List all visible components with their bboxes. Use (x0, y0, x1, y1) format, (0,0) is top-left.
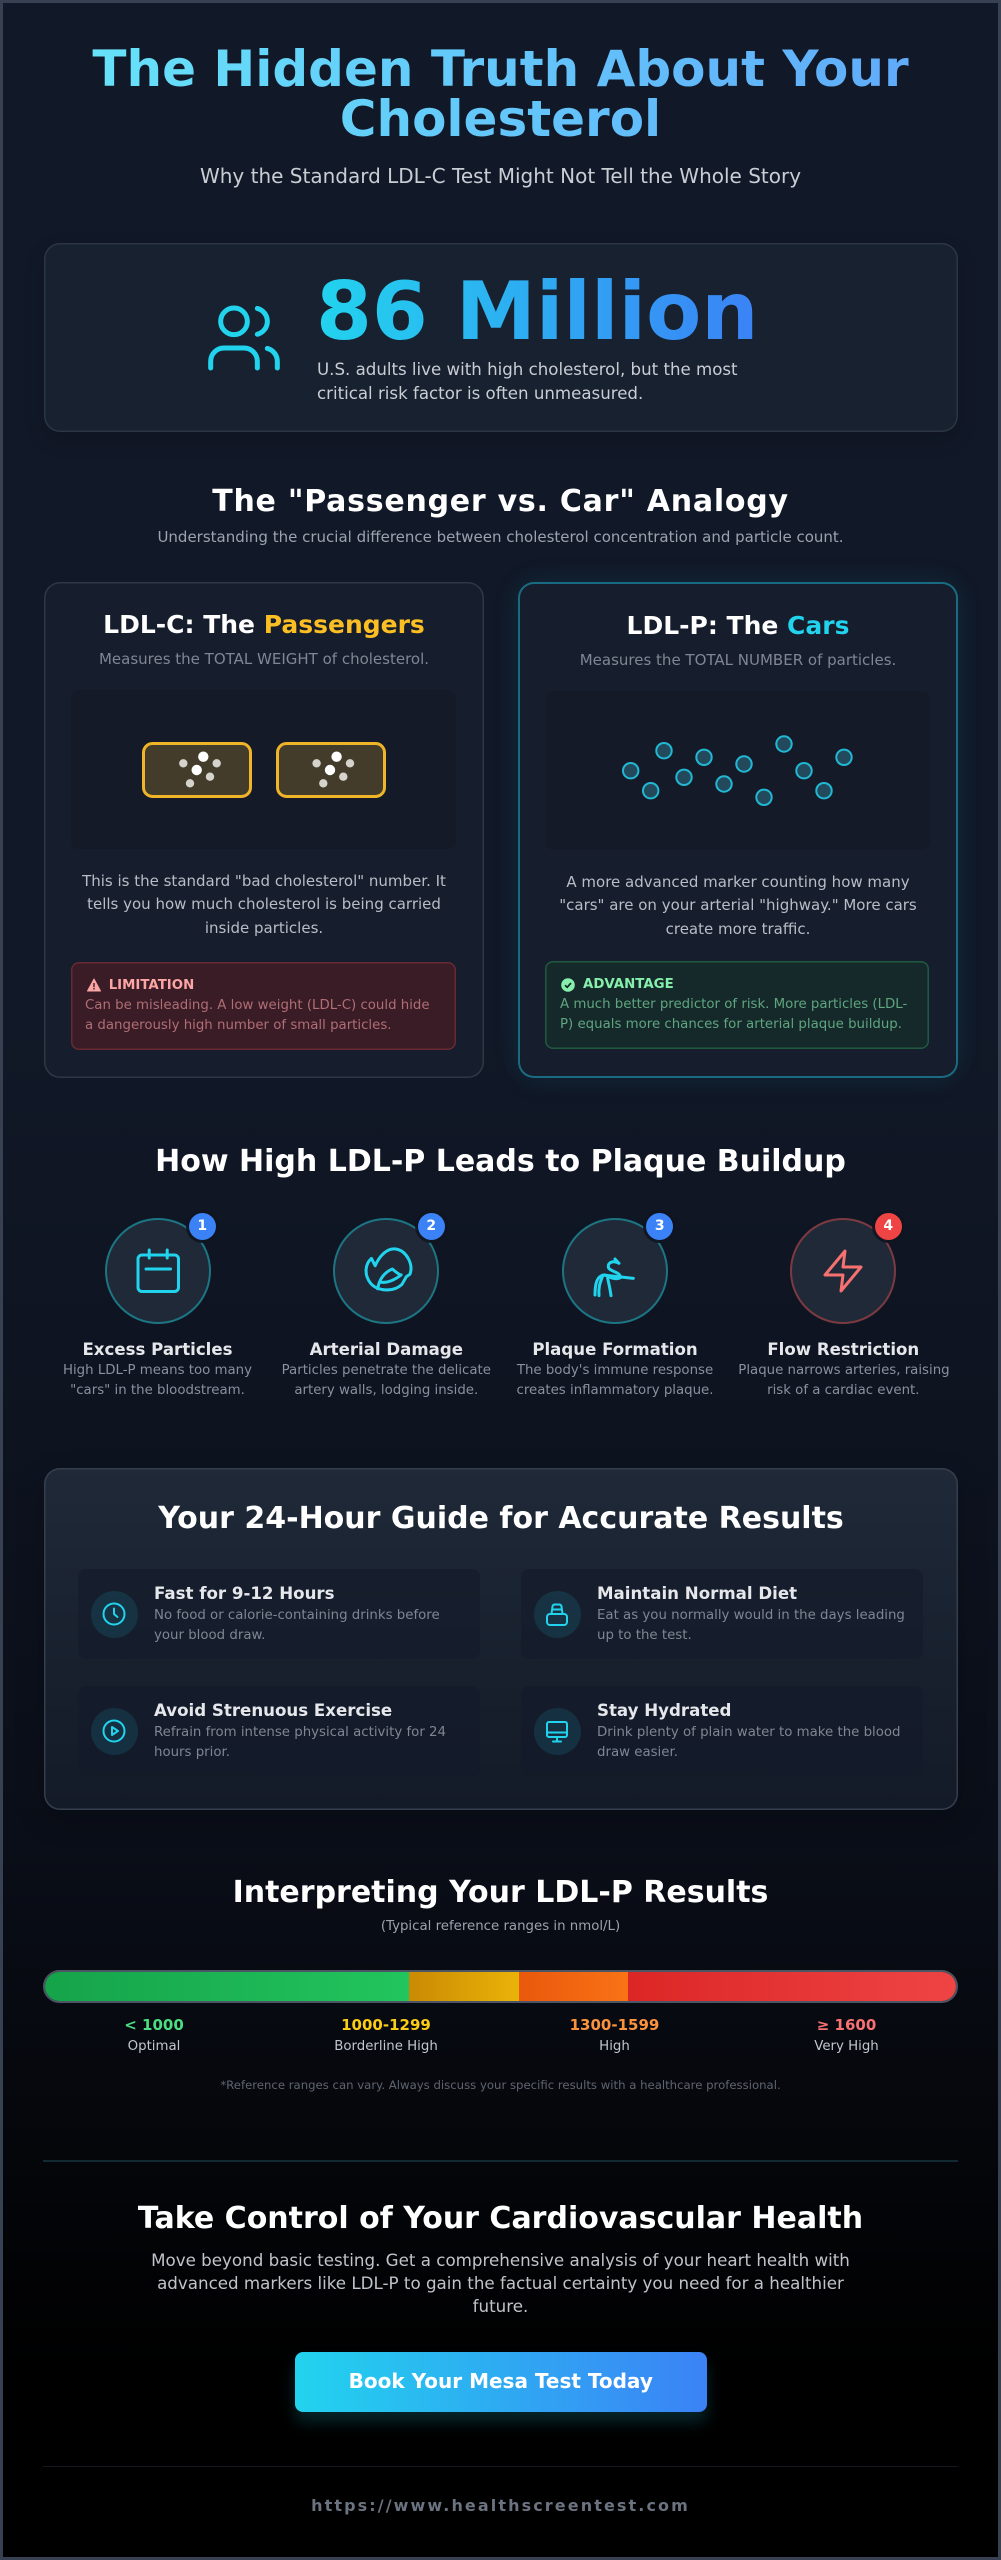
item title: Stay Hydrated (597, 1701, 731, 1720)
step 3 text (516, 1363, 714, 1398)
step 1 text: "cars" in the bloodstream. (70, 1383, 245, 1398)
item title: Maintain Normal Diet (597, 1584, 797, 1603)
guide item: fast (78, 1569, 480, 1659)
item text: Refrain from intense physical activity for 24 (154, 1724, 446, 1740)
range label: borderline high (334, 2016, 438, 2054)
range label: optimal: < 1000 (124, 2016, 184, 2034)
step 1 title: Excess Particles (82, 1340, 233, 1359)
step 4: flow restriction (738, 1213, 950, 1398)
LDL-C description: tells you how much cholesterol is being carried (87, 895, 441, 913)
item text (597, 1724, 901, 1760)
chart: LDL-P range bar (43, 1970, 958, 2003)
LDL-P subheading: Measures the TOTAL NUMBER of particles. (580, 650, 896, 668)
item text (154, 1724, 446, 1760)
LDL-P heading: LDL-P: The Cars (627, 610, 849, 640)
step 2: arterial damage (282, 1213, 491, 1398)
limitation text: a dangerously high number of small particles. (85, 1018, 392, 1032)
LDL-C description: inside particles. (205, 919, 323, 937)
step 3: plaque formation (516, 1213, 714, 1398)
footer url: https://www.healthscreentest.com (311, 2496, 690, 2515)
icon: monitor (534, 1708, 580, 1754)
item text: hours prior. (154, 1744, 230, 1760)
step 2 text (282, 1363, 491, 1398)
item title: Fast for 9-12 Hours (154, 1584, 335, 1603)
range label: optimal: Optimal (128, 2039, 180, 2054)
step 4 badge: 4 (883, 1218, 893, 1234)
step 1: excess particles (63, 1213, 252, 1398)
LDL-P description: "cars" are on your arterial "highway." More cars (559, 896, 917, 914)
step 3 badge (646, 1212, 673, 1240)
panel: 86 million stat (44, 243, 958, 432)
range label: very high: ≥ 1600 (817, 2016, 876, 2034)
step 1 badge: 1 (197, 1218, 207, 1234)
step 2 icon circle (333, 1218, 439, 1324)
step 1 text (63, 1363, 252, 1398)
step 4 text (738, 1363, 950, 1398)
LDL-P description (559, 873, 917, 938)
LDL-C description (82, 872, 446, 937)
title: Cholesterol (340, 90, 661, 148)
illustration: passenger capsules (71, 690, 456, 849)
item text: up to the test. (597, 1628, 692, 1642)
guide heading: Your 24-Hour Guide for Accurate Results (158, 1501, 844, 1536)
guide item: diet (521, 1569, 923, 1659)
callout: advantage (545, 961, 929, 1049)
range label: borderline high: Borderline High (334, 2039, 438, 2054)
heading: interpreting results: Interpreting Your LDL-P Results (233, 1875, 768, 1910)
limitation label: LIMITATION (109, 978, 194, 992)
item text: No food or calorie-containing drinks before (154, 1608, 440, 1622)
heading: take control: Take Control of Your Cardiovascular Health (138, 2201, 863, 2236)
stat description: critical risk factor is often unmeasured. (317, 384, 643, 402)
step 3 badge: 3 (655, 1218, 665, 1234)
step 2 badge (418, 1212, 445, 1240)
call to action text: future. (473, 2296, 528, 2316)
range label: borderline high: 1000-1299 (341, 2016, 431, 2034)
step 3 title: Plaque Formation (532, 1340, 698, 1359)
step 4 title: Flow Restriction (767, 1340, 919, 1359)
panel: 24-hour guide (44, 1468, 958, 1810)
title: The Hidden Truth About Your (92, 40, 909, 98)
LDL-C description: This is the standard "bad cholesterol" number. It (82, 872, 446, 890)
advantage text (560, 997, 907, 1032)
icon: clock (90, 1590, 138, 1638)
icon: users (208, 306, 280, 370)
step 2 badge: 2 (426, 1218, 436, 1234)
icon: jar (534, 1590, 580, 1638)
guide item: hydrate (521, 1686, 923, 1776)
step 4 text: Plaque narrows arteries, raising (738, 1363, 950, 1378)
item text: your blood draw. (154, 1628, 265, 1642)
title (0, 44, 1001, 144)
step 3 icon circle (562, 1218, 668, 1324)
range label: high: 1300-1599 (570, 2016, 659, 2034)
item text (597, 1608, 905, 1642)
button: book test (294, 2352, 707, 2412)
range label: high: High (599, 2039, 630, 2054)
step 2 text: artery walls, lodging inside. (294, 1383, 478, 1398)
item text: Eat as you normally would in the days leading (597, 1608, 905, 1622)
button: book test: Book Your Mesa Test Today (349, 2369, 653, 2393)
call to action text (151, 2250, 850, 2316)
heading: plaque buildup: How High LDL-P Leads to Plaque Buildup (155, 1144, 846, 1179)
panel: LDL-P cars (518, 582, 958, 1078)
icon: check (561, 978, 575, 992)
step 2 text: Particles penetrate the delicate (282, 1363, 491, 1378)
range label: optimal (124, 2016, 184, 2054)
stat description: U.S. adults live with high cholesterol, but the most (317, 360, 738, 378)
range label: very high (814, 2016, 879, 2054)
step 2 title: Arterial Damage (310, 1340, 463, 1359)
item text: Drink plenty of plain water to make the blood (597, 1724, 901, 1740)
icon: warning (87, 978, 101, 992)
guide item: exercise (78, 1686, 480, 1776)
advantage label: ADVANTAGE (583, 976, 674, 992)
step 1 text: High LDL-P means too many (63, 1363, 252, 1378)
limitation text (85, 998, 430, 1032)
analogy subheading: Understanding the crucial difference between cholesterol concentration and particle count. (157, 528, 844, 546)
step 1 badge (189, 1212, 216, 1240)
LDL-P description: create more traffic. (666, 920, 810, 938)
LDL-C subheading: Measures the TOTAL WEIGHT of cholesterol. (99, 650, 429, 668)
subtitle: Why the Standard LDL-C Test Might Not Tell the Whole Story (200, 164, 801, 188)
range label: high (570, 2016, 659, 2054)
call to action text: advanced markers like LDL-P to gain the factual certainty you need for a healthier (157, 2273, 844, 2293)
stat number: 86 Million (316, 264, 759, 358)
step 4 badge (875, 1212, 902, 1240)
item title: Avoid Strenuous Exercise (154, 1701, 392, 1720)
LDL-P description: A more advanced marker counting how many (566, 873, 910, 891)
footnote: *Reference ranges can vary. Always discuss your specific results with a healthcare professional. (220, 2078, 781, 2092)
stat description (317, 360, 738, 402)
step 1 icon circle (104, 1218, 210, 1324)
step 3 text: creates inflammatory plaque. (516, 1383, 714, 1398)
icon: play circle (90, 1708, 138, 1754)
item text: draw easier. (597, 1744, 678, 1760)
panel: LDL-C passengers (44, 582, 484, 1078)
step 4 icon circle (790, 1218, 896, 1324)
heading: analogy: The "Passenger vs. Car" Analogy (212, 484, 789, 519)
limitation text: Can be misleading. A low weight (LDL-C) could hide (85, 998, 430, 1012)
advantage text: P) equals more chances for arterial plaque buildup. (560, 1017, 902, 1032)
step 4 text: risk of a cardiac event. (767, 1383, 920, 1398)
illustration: car particles (546, 691, 930, 850)
range label: very high: Very High (814, 2039, 879, 2054)
callout: limitation (71, 962, 456, 1050)
item text (154, 1608, 440, 1642)
LDL-C heading: LDL-C: The Passengers (103, 610, 425, 639)
results subheading: (Typical reference ranges in nmol/L) (381, 1919, 620, 1934)
step 3 text: The body's immune response (517, 1363, 713, 1378)
advantage text: A much better predictor of risk. More particles (LDL- (560, 997, 907, 1012)
call to action text: Move beyond basic testing. Get a comprehensive analysis of your heart health with (151, 2250, 850, 2270)
